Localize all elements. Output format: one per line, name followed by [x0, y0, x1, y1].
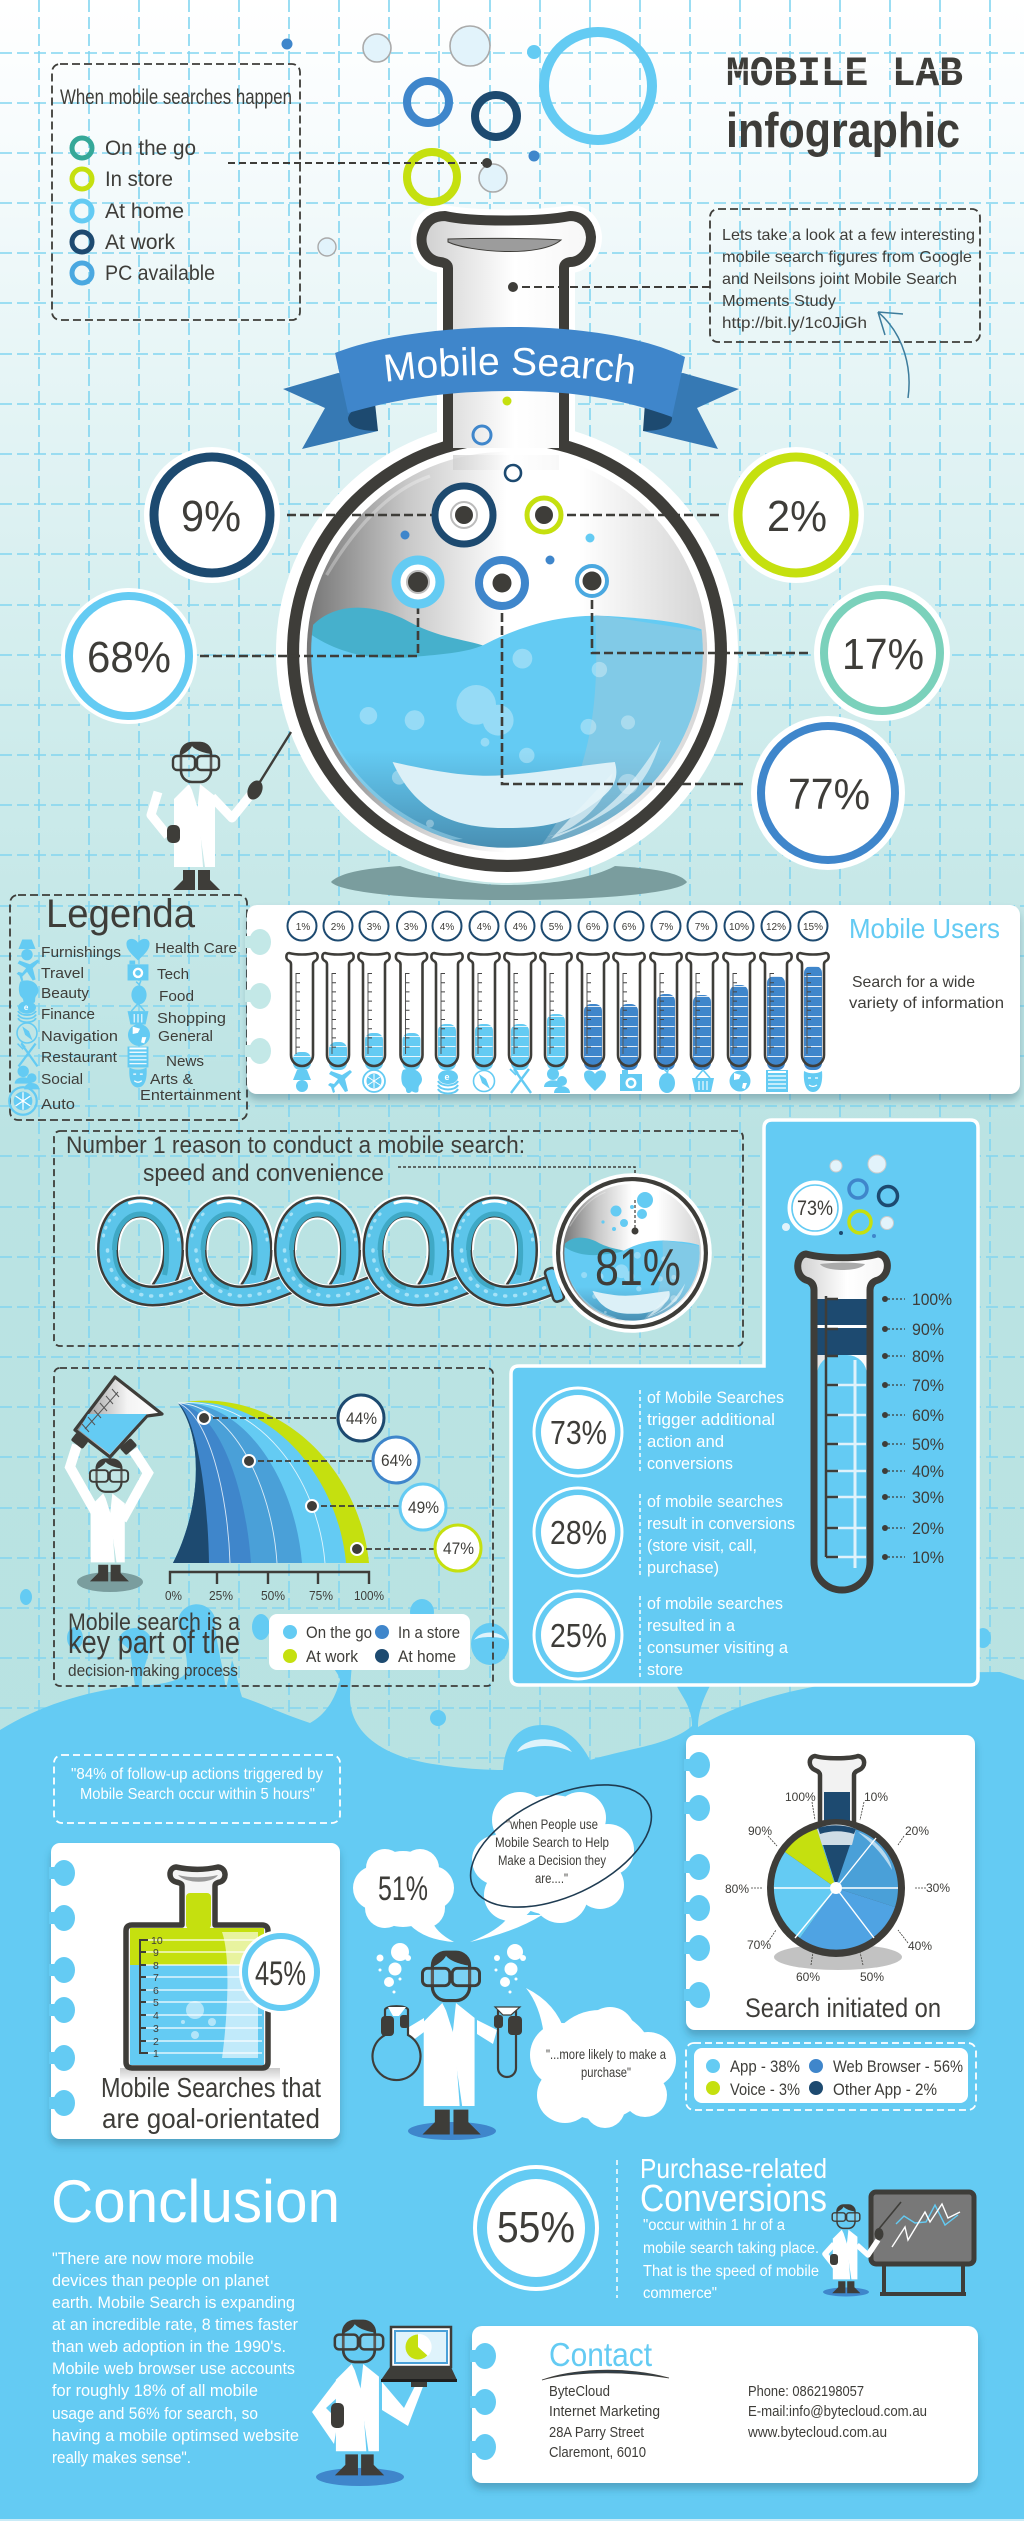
square flask: 7 [153, 1972, 159, 1984]
legenda box: Arts & [150, 1071, 193, 1088]
cloud: more likely: purchase" [581, 2065, 631, 2080]
panel: speed and convenience coil: Number 1 reason to conduct a mobile search: [66, 1132, 525, 1159]
chart legend: On the go [306, 1623, 372, 1642]
big test tube [798, 1254, 887, 1590]
title: MOBILE LAB [726, 50, 963, 98]
search legend: Web Browser - 56% [833, 2057, 963, 2076]
flow chart: 44% [346, 1409, 377, 1428]
tube scale: 90% [912, 1320, 944, 1339]
callout 17% [577, 566, 950, 721]
pie flask [767, 1756, 905, 1970]
pie labels: 60% [796, 1970, 820, 1984]
bubbles and 73% tag: 73% [797, 1197, 833, 1220]
square flask: 2 [153, 2036, 159, 2048]
when mobile searches happen legend: In store [105, 168, 173, 191]
pie labels: 90% [748, 1824, 772, 1838]
chart axis [165, 1572, 384, 1603]
callout 77% [479, 560, 905, 870]
tube scale: 50% [912, 1435, 944, 1454]
cloud: more likely: "...more likely to make a [546, 2047, 666, 2062]
percentage bubbles: 6% [586, 922, 600, 933]
stat 73%: 73% [550, 1414, 607, 1451]
legenda box: Finance [41, 1006, 95, 1023]
stat 28%: result in conversions [647, 1514, 795, 1533]
legenda box: Beauty [41, 985, 90, 1002]
conclusion: really makes sense". [52, 2448, 191, 2467]
panel: search initiated on: Search initiated on [745, 1993, 941, 2023]
banner: mobile search [283, 327, 739, 449]
blackboard with scientist [823, 2192, 974, 2296]
legenda box: Furnishings [41, 944, 121, 961]
percentage bubbles: 2% [331, 922, 345, 933]
bubbles and 73% tag [782, 1155, 898, 1238]
chart axis: 25% [209, 1588, 233, 1603]
scientist with laptop [312, 2320, 457, 2486]
main flask [276, 216, 738, 883]
panel: contact [470, 2326, 978, 2483]
percentage bubbles [288, 912, 828, 940]
stat 28%: purchase) [647, 1558, 719, 1577]
flow chart: 47% [443, 1539, 474, 1558]
panel: blue l-shaped stats [511, 1120, 978, 1685]
legenda box: Tech [157, 966, 189, 983]
panel: goal-orientated card: Mobile Searches that [101, 2072, 321, 2103]
flask shadow [331, 866, 687, 900]
conclusion: devices than people on planet [52, 2271, 269, 2290]
conclusion: than web adoption in the 1990's. [52, 2337, 286, 2356]
tube liquid levels [293, 966, 822, 1070]
callout 9% [144, 447, 493, 583]
cloud: 51% [353, 1849, 454, 1942]
percentage bubbles: 15% [803, 922, 823, 933]
chart legend [269, 1614, 470, 1670]
title [724, 50, 966, 158]
legenda box [9, 892, 247, 1120]
conclusion: Conclusion [51, 2168, 340, 2235]
chart axis: 100% [354, 1588, 384, 1603]
legenda box: News [166, 1053, 204, 1070]
coil tube [104, 1201, 565, 1303]
pie labels: 20% [905, 1824, 929, 1838]
legenda box: Auto [41, 1096, 75, 1113]
callout 68%: 68% [87, 633, 171, 682]
when mobile searches happen legend: When mobile searches happen [60, 86, 292, 109]
percentage bubbles: 4% [513, 922, 527, 933]
legenda box: Entertainment [140, 1087, 242, 1104]
square flask: 10 [151, 1935, 163, 1947]
panel: contact: ByteCloud [549, 2383, 610, 2400]
flow chart [173, 1395, 481, 1571]
purchase-related conversions: That is the speed of mobile [643, 2263, 819, 2280]
callout 68% [61, 560, 440, 724]
legenda box: Travel [41, 965, 84, 982]
stat 73%: action and [647, 1432, 724, 1451]
stat 25%: consumer visiting a [647, 1638, 789, 1657]
stat 73%: trigger additional [647, 1410, 775, 1429]
blue wave section [0, 1604, 1024, 2521]
cloud: more likely [526, 1988, 676, 2128]
tube scale: 10% [912, 1548, 944, 1567]
arrow: curved pointer to link [878, 312, 909, 398]
panel: decision-making process [54, 1368, 493, 1686]
legenda box: Legenda [46, 892, 196, 936]
square flask: 3 [153, 2023, 159, 2035]
percentage bubbles: 7% [659, 922, 673, 933]
panel: decision-making process: key part of the [68, 1624, 240, 1660]
conclusion: usage and 56% for search, so [52, 2404, 258, 2423]
panel: search initiated on [684, 1735, 975, 2030]
panel: decision-making process: decision-making process [68, 1661, 238, 1680]
cloud: 51%: 51% [378, 1870, 428, 1908]
stat 73%: conversions [647, 1454, 733, 1473]
when mobile searches happen legend [52, 64, 300, 320]
panel: speed and convenience coil [54, 1131, 743, 1346]
tube scale: 30% [912, 1488, 944, 1507]
small flask with 81%: 81% [595, 1239, 681, 1297]
stat 28%: of mobile searches [647, 1492, 783, 1511]
test tube [494, 2007, 522, 2077]
cloud: quote: Make a Decision they [498, 1853, 606, 1868]
legenda box: Social [41, 1071, 83, 1088]
pouring scientist [70, 1377, 162, 1592]
round flask [372, 2006, 421, 2080]
intro text box: mobile search figures from Google [722, 249, 972, 266]
pie labels: 80% [725, 1882, 749, 1896]
cloud: quote: Mobile Search to Help [495, 1835, 609, 1850]
purchase-related conversions: Purchase-related [640, 2153, 827, 2184]
when mobile searches happen legend: PC available [105, 262, 215, 285]
pie labels: 50% [860, 1970, 884, 1984]
percentage bubbles: 3% [367, 922, 381, 933]
stat 55% [475, 2167, 597, 2289]
purchase-related conversions: mobile search taking place. [643, 2240, 819, 2257]
intro text box: Moments Study [722, 293, 836, 310]
percentage bubbles: 1% [296, 922, 310, 933]
panel: goal-orientated card: 45% [255, 1955, 306, 1993]
callout 77%: 77% [788, 770, 870, 819]
84% quote box: Mobile Search occur within 5 hours" [80, 1786, 315, 1803]
purchase-related conversions: commerce" [643, 2285, 717, 2302]
square flask: 4 [153, 2010, 159, 2022]
test tubes [286, 953, 829, 1066]
panel: speed and convenience coil: speed and convenience [143, 1160, 384, 1187]
cloud: quote: are...." [535, 1871, 568, 1886]
panel: contact: E-mail:info@bytecloud.com.au [748, 2403, 927, 2420]
search legend [686, 2043, 976, 2110]
small flask with 81% [552, 1173, 712, 1333]
intro text box: Lets take a look at a few interesting [722, 227, 975, 244]
callout 2%: 2% [767, 492, 827, 541]
purchase-related conversions [617, 2153, 827, 2302]
conclusion: at an incredible rate, 8 times faster [52, 2315, 298, 2334]
panel: contact: Contact [549, 2336, 652, 2373]
chart axis: 50% [261, 1588, 285, 1603]
when mobile searches happen legend: At home [105, 200, 184, 223]
cloud: quote: "when People use [506, 1817, 598, 1832]
square flask: 1 [153, 2048, 159, 2060]
legenda box: General [158, 1028, 213, 1045]
purchase-related conversions: "occur within 1 hr of a [643, 2217, 785, 2234]
category icons [293, 1068, 822, 1094]
top bubbles and rings [228, 26, 652, 256]
legenda box: Food [159, 988, 194, 1005]
chart legend: At work [306, 1647, 358, 1666]
panel: mobile users: variety of information [849, 995, 1004, 1012]
panel: goal-orientated card: are goal-orientated [102, 2103, 320, 2134]
percentage bubbles: 4% [477, 922, 491, 933]
stat 25%: store [647, 1660, 683, 1679]
scientist with pointer [151, 732, 291, 890]
stat 28% [534, 1488, 795, 1577]
panel: decision-making process: Mobile search is a [68, 1609, 241, 1636]
stat 25%: resulted in a [647, 1616, 736, 1635]
conclusion: "There are now more mobile [52, 2249, 254, 2268]
panel: contact: Phone: 0862198057 [748, 2383, 864, 2400]
percentage bubbles: 5% [549, 922, 563, 933]
when mobile searches happen legend: On the go [105, 137, 196, 160]
stat 73% [534, 1388, 784, 1476]
percentage bubbles: 10% [729, 922, 749, 933]
square flask: 8 [153, 1960, 159, 1972]
percentage bubbles: 7% [695, 922, 709, 933]
conclusion [51, 2168, 340, 2467]
pie labels: 10% [864, 1790, 888, 1804]
chart axis: 75% [309, 1588, 333, 1603]
tube scale: 20% [912, 1519, 944, 1538]
pie labels: 70% [747, 1938, 771, 1952]
84% quote box [54, 1755, 340, 1823]
square flask [120, 1867, 280, 2082]
intro text box [710, 209, 980, 342]
pie labels [725, 1790, 950, 1984]
panel: goal-orientated card [49, 1843, 340, 2139]
panel: contact: Internet Marketing [549, 2403, 660, 2420]
chart legend: At home [398, 1647, 456, 1666]
flow chart: 64% [381, 1451, 412, 1470]
callout 2% [527, 447, 864, 583]
stat 25% [534, 1591, 789, 1679]
panel: contact: Claremont, 6010 [549, 2444, 646, 2461]
purchase-related conversions: Conversions [640, 2178, 827, 2220]
tube scale: 40% [912, 1462, 944, 1481]
conclusion: earth. Mobile Search is expanding [52, 2293, 295, 2312]
search legend: Voice - 3% [730, 2080, 800, 2099]
pie labels: 100% [785, 1790, 816, 1804]
panel: mobile users [245, 905, 1020, 1094]
intro text box: and Neilsons joint Mobile Search [722, 271, 957, 288]
stat 73%: of Mobile Searches [647, 1388, 784, 1407]
square flask: 6 [153, 1985, 159, 1997]
legenda box: Health Care [155, 940, 237, 957]
square flask: 9 [153, 1947, 159, 1959]
chart axis: 0% [165, 1588, 182, 1603]
percentage bubbles: 4% [440, 922, 454, 933]
callout 9%: 9% [181, 492, 241, 541]
banner: mobile search: Mobile Search [385, 346, 634, 384]
percentage bubbles: 3% [404, 922, 418, 933]
tube scale [882, 1290, 952, 1567]
square flask: 5 [153, 1997, 159, 2009]
panel: contact: 28A Parry Street [549, 2424, 645, 2441]
search legend: Other App - 2% [833, 2080, 937, 2099]
conclusion: Mobile web browser use accounts [52, 2359, 295, 2378]
pie labels: 30% [926, 1881, 950, 1895]
when mobile searches happen legend: At work [105, 231, 175, 254]
callout 17%: 17% [842, 630, 924, 679]
percentage bubbles: 6% [622, 922, 636, 933]
percentage bubbles: 12% [766, 922, 786, 933]
pie labels: 40% [908, 1939, 932, 1953]
stat 25%: of mobile searches [647, 1594, 783, 1613]
stat 28%: 28% [550, 1514, 607, 1551]
stat 25%: 25% [550, 1617, 607, 1654]
panel: mobile users: Mobile Users [849, 913, 1000, 944]
flow chart: 49% [408, 1498, 439, 1517]
conclusion: having a mobile optimsed website [52, 2426, 299, 2445]
chart legend: In a store [398, 1623, 460, 1642]
84% quote box: "84% of follow-up actions triggered by [71, 1766, 323, 1783]
cloud: quote [452, 1760, 670, 1942]
search legend: App - 38% [730, 2057, 800, 2076]
stat 55%: 55% [497, 2203, 575, 2252]
tube scale: 60% [912, 1406, 944, 1425]
tube scale: 100% [912, 1290, 952, 1309]
intro text box: http://bit.ly/1c0JiGh [722, 315, 867, 332]
panel: mobile users: Search for a wide [852, 974, 975, 991]
panel: contact: www.bytecloud.com.au [747, 2424, 887, 2441]
tube scale: 70% [912, 1376, 944, 1395]
title: infographic [726, 104, 960, 158]
tube scale: 80% [912, 1347, 944, 1366]
legenda box: Shopping [157, 1010, 226, 1027]
legenda box: Restaurant [41, 1049, 118, 1066]
conclusion: for roughly 18% of all mobile [52, 2381, 258, 2400]
stat 28%: (store visit, call, [647, 1536, 757, 1555]
legenda box: Navigation [41, 1028, 118, 1045]
scientist with flasks [372, 1943, 526, 2140]
